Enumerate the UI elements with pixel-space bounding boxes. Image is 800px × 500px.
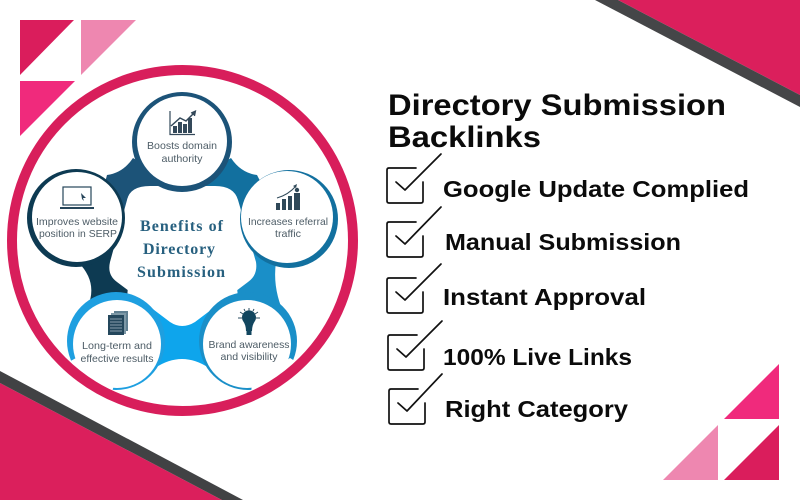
connector bands — [78, 158, 286, 368]
circle: brand awareness: and visibility — [220, 351, 278, 363]
checklist item: Instant Approval — [387, 264, 646, 313]
icon: checkbox — [389, 374, 442, 424]
icon: bar chart growth — [170, 111, 196, 134]
text: long-term results: Long-term and — [82, 340, 152, 352]
checklist item: 100% Live Links: 100% Live Links — [443, 344, 632, 370]
bottom-right triangles — [663, 364, 779, 480]
top-left triangles — [20, 20, 136, 136]
centre title: Submission — [137, 264, 225, 281]
icon: checkbox — [387, 264, 441, 313]
main heading — [388, 89, 726, 154]
icon: growth with person — [276, 184, 300, 210]
circle: boosts domain authority: authority — [162, 153, 203, 165]
circle: increases referral traffic — [240, 170, 338, 268]
checklist item: Google Update Complied: Google Update Complied — [443, 176, 749, 202]
main heading: Directory Submission — [388, 89, 726, 122]
circle: improves website position — [27, 169, 125, 267]
bottom-left corner banner — [0, 371, 243, 500]
circle: improves website position: position in SERP — [39, 228, 117, 240]
centre title — [137, 218, 225, 281]
top-right corner banner — [595, 0, 800, 107]
checklist item: Right Category — [389, 374, 628, 424]
icon: checkbox — [387, 154, 441, 203]
icon: checkbox — [387, 207, 441, 257]
circle: long-term results: effective results — [80, 353, 154, 365]
outer pink ring — [12, 70, 353, 411]
circle: long-term results — [58, 292, 165, 402]
checklist item: Instant Approval: Instant Approval — [443, 284, 646, 310]
icon: light bulb — [238, 308, 260, 335]
checklist item: Google Update Complied — [387, 154, 749, 203]
circle: boosts domain authority — [132, 92, 232, 192]
text: improves website position: Improves website — [36, 216, 118, 228]
centre title: Benefits of — [140, 218, 224, 235]
text: increases referral traffic: Increases referral — [248, 216, 328, 228]
main heading: Backlinks — [388, 121, 541, 154]
checklist item: 100% Live Links — [388, 321, 632, 370]
circular benefits diagram — [12, 70, 353, 411]
centre blob background — [109, 186, 256, 326]
circle: brand awareness — [199, 292, 306, 402]
checklist item: Manual Submission — [387, 207, 681, 257]
circle: increases referral traffic: traffic — [275, 228, 301, 240]
text: brand awareness: Brand awareness — [208, 339, 290, 351]
centre title: Directory — [143, 241, 215, 258]
text: boosts domain authority: Boosts domain — [147, 140, 217, 152]
checklist item: Right Category: Right Category — [445, 396, 628, 422]
icon: checkbox — [388, 321, 442, 370]
icon: laptop with cursor — [60, 187, 94, 209]
checklist item: Manual Submission: Manual Submission — [445, 229, 681, 255]
icon: document stack — [108, 311, 128, 335]
